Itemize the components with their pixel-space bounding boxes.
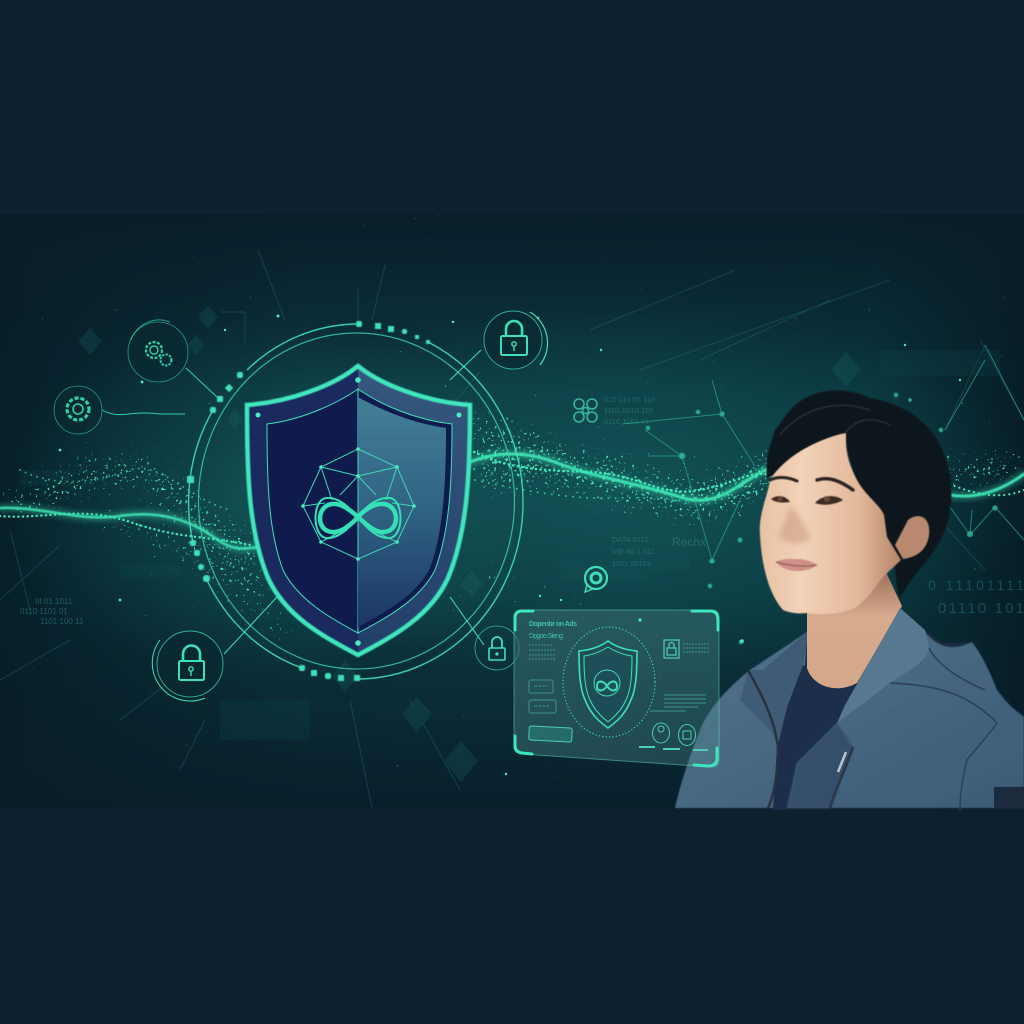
centre data text block: 1101 00101 [612,559,651,568]
shield [247,366,470,655]
collar left [740,632,807,745]
hair highlight [780,405,890,435]
icon: lock bottom right [450,597,519,670]
shield rivets [256,377,462,646]
centre data text block: 010 110 01 110 [604,395,655,404]
left binary text block: 0110 1101 01 [20,607,68,616]
central background panel [0,214,1024,809]
inner placket shadow [787,723,853,808]
eyes [771,496,843,505]
top band [0,0,1024,214]
glass dashboard panel [514,610,719,767]
data wave particles [0,410,1024,640]
face [760,433,901,614]
scattered bright points [59,314,961,775]
shield inner left panel [267,389,358,633]
panel shield icon [579,641,637,728]
icon: gears badge [128,320,217,397]
hair fringe [767,410,846,478]
panel mini text [529,644,709,713]
panel button [529,726,572,742]
panel dotted ring [563,627,655,737]
centre data text block: 0110 1001 01 [604,417,649,426]
shield outer frame [247,366,470,655]
network nodes on the right [622,345,1024,644]
person [675,390,1024,810]
zipper [748,670,853,808]
shield outline [247,366,470,655]
panel heading: Dopenbr on Ads [529,621,577,628]
jacket [675,608,1024,808]
left binary text block [20,597,84,626]
right binary text block: 01110 101 [938,600,1024,617]
icon: flower node [574,399,597,422]
neck [807,570,902,688]
shield outer frame right half [358,366,470,655]
hood inner [925,630,985,672]
centre data text block: DATA 0110 [612,535,649,544]
left binary text block: 1101 100 11 [40,617,84,626]
right binary text block: 0 11101111 [928,577,1024,593]
panel round icons [639,723,708,750]
centre data text block: Rechx [672,535,706,549]
centre data text block: 1101 0010 110 [604,406,653,415]
icon: lock top right [450,311,548,380]
background tech lines and diamonds [0,250,1024,808]
nose shadow [779,505,810,543]
panel corner brackets [515,611,718,766]
centre data text block: VIE 80 1 011 [612,547,655,556]
right binary text block [928,577,1024,617]
icon: lock bottom left [152,597,277,701]
glowing wave [0,450,1024,549]
bottom band [0,809,1024,1024]
hair back mass [767,390,951,598]
t-shirt [773,665,858,810]
left binary text block: III 01 1011 [35,597,73,606]
concentric rings [187,321,523,681]
infinity symbol [316,498,400,538]
ear [895,516,929,559]
polygon network [301,447,416,561]
collar right [837,608,929,723]
jacket seams [890,648,997,810]
jacket patch [994,787,1024,808]
shield inner right panel [358,397,446,627]
shield inner right panel edge [358,389,452,633]
panel subheading: Dpgoo Sieng [529,633,563,640]
icon: chat bubble [585,567,607,592]
panel lock icon [664,640,679,658]
icon: gear badge [54,386,185,434]
brows [770,477,853,490]
mouth [776,559,817,571]
centre data text block [604,395,706,568]
